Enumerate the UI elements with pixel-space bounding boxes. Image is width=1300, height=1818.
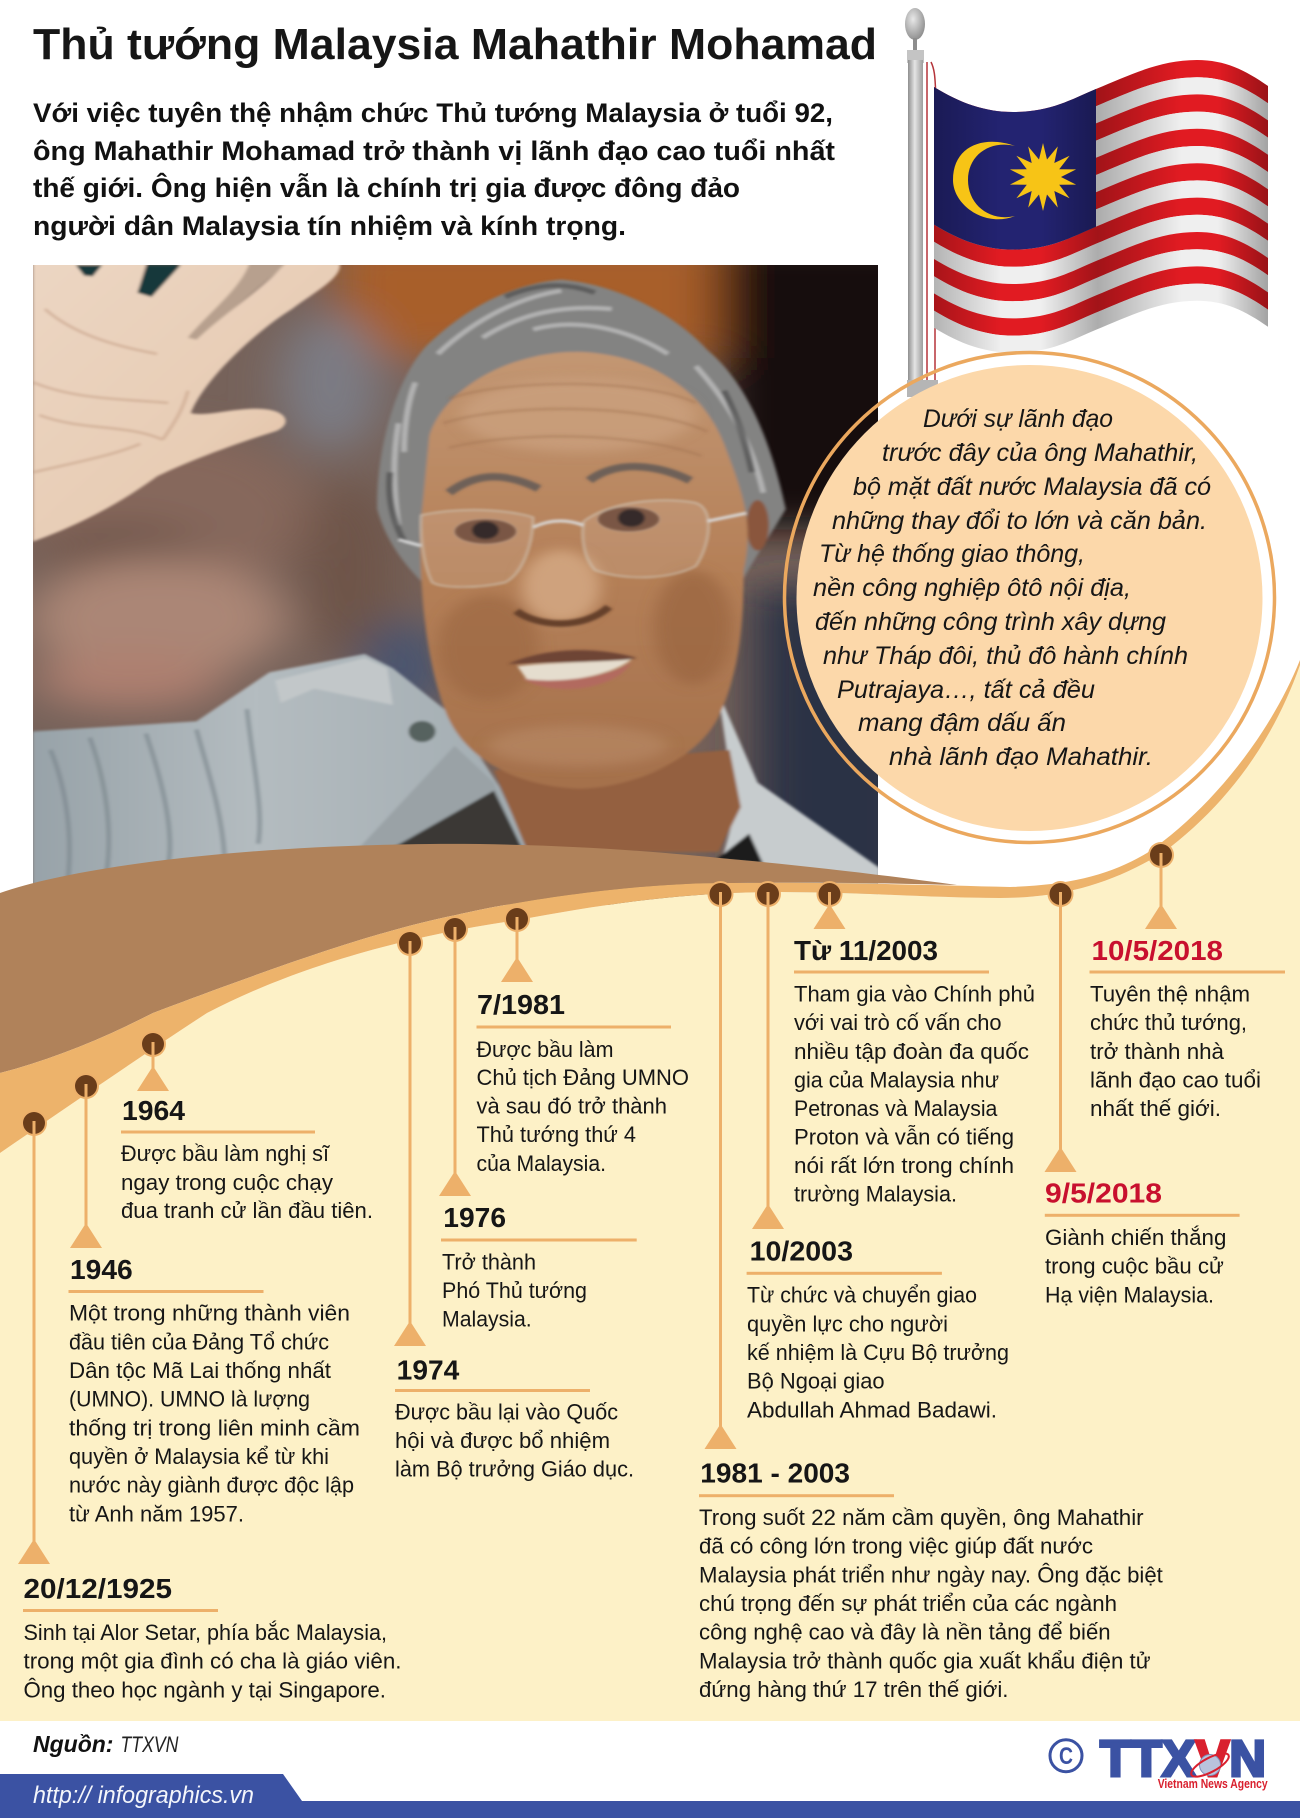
event: 10/2003: 10/2003 xyxy=(750,1236,853,1267)
glasses xyxy=(421,500,709,587)
logo: TTXVN Vietnam News Agency: C xyxy=(1059,1743,1073,1770)
flag pole xyxy=(905,8,938,397)
quote text: Dưới sự lãnh đạo xyxy=(923,405,1113,433)
event: 1946: quyền ở Malaysia kể từ khi xyxy=(69,1444,329,1469)
event: 10/2003: Abdullah Ahmad Badawi. xyxy=(747,1397,997,1422)
arm and shirt xyxy=(33,654,528,913)
event: 9/5/2018: Giành chiến thắng xyxy=(1045,1225,1226,1250)
event: 1976: 1976 xyxy=(443,1202,506,1233)
event: 10/5/2018: chức thủ tướng, xyxy=(1090,1010,1247,1035)
intro text block: thế giới. Ông hiện vẫn là chính trị gia được đông đảo xyxy=(33,172,740,203)
event: 7/1981: của Malaysia. xyxy=(476,1151,606,1176)
event: Từ 11/2003: nói rất lớn trong chính xyxy=(794,1153,1014,1178)
event: 9/5/2018 xyxy=(1045,1178,1240,1307)
event: 7/1981: Thủ tướng thứ 4 xyxy=(476,1122,636,1147)
source line: Nguồn: TTXVN xyxy=(33,1731,179,1757)
event: 1974: hội và được bổ nhiệm xyxy=(395,1428,610,1453)
quote text: trước đây của ông Mahathir, xyxy=(882,439,1198,467)
marker: 1964 xyxy=(137,1031,169,1091)
event: Từ 11/2003: Từ 11/2003 xyxy=(794,935,938,966)
quote text: đến những công trình xây dựng xyxy=(815,608,1166,636)
event: 1974: 1974 xyxy=(397,1354,460,1385)
event: Từ 11/2003: trường Malaysia. xyxy=(794,1182,957,1207)
event: 20/12/1925: Ông theo học ngành y tại Singapore. xyxy=(24,1677,386,1702)
event: 1981 - 2003: Malaysia phát triển như ngày nay. Ông đặc biệt xyxy=(699,1562,1163,1587)
event: 10/2003: quyền lực cho người xyxy=(747,1311,948,1336)
photo: Mahathir Mohamad waving xyxy=(33,265,878,905)
event: 10/5/2018: Tuyên thệ nhậm xyxy=(1090,982,1250,1007)
quote text: Từ hệ thống giao thông, xyxy=(819,540,1085,568)
event: 10/2003: kế nhiệm là Cựu Bộ trưởng xyxy=(747,1340,1009,1365)
event: 1981 - 2003 xyxy=(699,1458,1163,1702)
Malaysian flag xyxy=(934,60,1268,353)
event: 1964: ngay trong cuộc chạy xyxy=(121,1170,333,1195)
event: 1981 - 2003: chú trọng đến sự phát triển của các ngành xyxy=(699,1591,1117,1616)
event: 1981 - 2003: đứng hàng thứ 17 trên thế giới. xyxy=(699,1677,1008,1702)
event: 1946: Một trong những thành viên xyxy=(69,1301,350,1326)
event: 1974 xyxy=(395,1354,634,1482)
event: Từ 11/2003: Petronas và Malaysia xyxy=(794,1096,998,1121)
intro text block xyxy=(33,98,835,241)
event: 10/2003: Từ chức và chuyển giao xyxy=(747,1283,977,1308)
event: 1964: đua tranh cử lần đầu tiên. xyxy=(121,1198,373,1223)
event: 1981 - 2003: Malaysia trở thành quốc gia xuất khẩu điện tử xyxy=(699,1648,1151,1673)
quote text: mang đậm dấu ấn xyxy=(858,709,1066,737)
event: 1946: đầu tiên của Đảng Tổ chức xyxy=(69,1329,329,1354)
event: Từ 11/2003: gia của Malaysia như xyxy=(794,1068,999,1092)
quote text: bộ mặt đất nước Malaysia đã có xyxy=(853,473,1211,501)
event: Từ 11/2003: Tham gia vào Chính phủ xyxy=(794,982,1035,1007)
event: 10/5/2018: lãnh đạo cao tuổi xyxy=(1090,1068,1261,1092)
event: 7/1981: 7/1981 xyxy=(477,989,565,1020)
marker: 20/12/1925 xyxy=(18,1110,50,1564)
marker: 7/1981 xyxy=(501,906,533,982)
event: 1976: Malaysia. xyxy=(442,1307,532,1332)
event: 10/2003 xyxy=(747,1236,1009,1422)
event: 7/1981: Chủ tịch Đảng UMNO xyxy=(476,1065,689,1090)
event: 7/1981: Được bầu làm xyxy=(476,1037,614,1062)
facial features xyxy=(438,378,732,766)
event: 1981 - 2003: Trong suốt 22 năm cầm quyền, ông Mahathir xyxy=(699,1505,1144,1530)
event: 10/5/2018: nhất thế giới. xyxy=(1090,1096,1221,1121)
logo: TTXVN Vietnam News Agency: Vietnam News Agency xyxy=(1158,1776,1268,1791)
event: 1964: 1964 xyxy=(122,1095,185,1126)
event: 7/1981: và sau đó trở thành xyxy=(476,1094,667,1118)
quote text xyxy=(813,405,1211,771)
event: 1976 xyxy=(441,1202,637,1332)
face xyxy=(420,352,748,789)
event: 1976: Trở thành xyxy=(442,1249,536,1274)
quote text: Putrajaya…, tất cả đều xyxy=(837,676,1095,704)
event: 1946 xyxy=(68,1254,360,1526)
event: 10/2003: Bộ Ngoại giao xyxy=(747,1369,885,1394)
event: 9/5/2018: Hạ viện Malaysia. xyxy=(1045,1282,1214,1307)
quote text: như Tháp đôi, thủ đô hành chính xyxy=(823,642,1188,670)
event: 1981 - 2003: 1981 - 2003 xyxy=(700,1458,850,1489)
event: Từ 11/2003: nhiều tập đoàn đa quốc xyxy=(794,1039,1029,1064)
event: 10/5/2018: 10/5/2018 xyxy=(1092,935,1223,966)
quote text: nền công nghiệp ôtô nội địa, xyxy=(813,574,1131,602)
marker: 1981-2003 xyxy=(704,881,736,1449)
event: 1946: nước này giành được độc lập xyxy=(69,1473,354,1498)
event: 1981 - 2003: công nghệ cao và đây là nền tảng để biến xyxy=(699,1620,1111,1645)
marker: 1974 xyxy=(394,930,426,1346)
hand xyxy=(188,262,289,340)
event: 1974: làm Bộ trưởng Giáo dục. xyxy=(395,1457,634,1482)
event: Từ 11/2003: Proton và vẫn có tiếng xyxy=(794,1124,1014,1150)
hair xyxy=(377,280,786,587)
event: 1946: Dân tộc Mã Lai thống nhất xyxy=(69,1358,331,1383)
event: 20/12/1925: trong một gia đình có cha là giáo viên. xyxy=(24,1649,402,1674)
marker: 10/2003 xyxy=(752,881,784,1229)
logo: TTXVN Vietnam News Agency: TTXVN xyxy=(1100,1730,1266,1787)
event: 20/12/1925 xyxy=(23,1573,402,1702)
footer bar xyxy=(0,1774,1300,1818)
intro text block: ông Mahathir Mohamad trở thành vị lãnh đạo cao tuổi nhất xyxy=(33,136,835,166)
event: 1946: (UMNO). UMNO là lượng xyxy=(69,1387,310,1412)
event: 1974: Được bầu lại vào Quốc xyxy=(395,1399,618,1424)
quote circle xyxy=(784,352,1274,842)
event: 1946: 1946 xyxy=(70,1254,133,1285)
timeline background: cream panel xyxy=(0,665,1300,1721)
brown swoosh xyxy=(0,844,957,1073)
event: 10/5/2018: trở thành nhà xyxy=(1090,1039,1225,1064)
marker: 1976 xyxy=(439,916,471,1196)
event: 1981 - 2003: đã có công lớn trong việc giúp đất nước xyxy=(699,1534,1093,1559)
title: Thủ tướng Malaysia Mahathir Mohamad xyxy=(33,20,877,69)
event: 10/5/2018 xyxy=(1090,935,1285,1121)
orange timeline band xyxy=(0,660,1300,1153)
intro text block: Với việc tuyên thệ nhậm chức Thủ tướng Malaysia ở tuổi 92, xyxy=(33,98,833,128)
event: 1946: từ Anh năm 1957. xyxy=(69,1501,244,1526)
event: 9/5/2018: trong cuộc bầu cử xyxy=(1045,1254,1224,1279)
event: 1976: Phó Thủ tướng xyxy=(442,1278,587,1303)
event: 9/5/2018: 9/5/2018 xyxy=(1045,1178,1162,1209)
event: 7/1981 xyxy=(476,989,689,1176)
event: 20/12/1925: Sinh tại Alor Setar, phía bắc Malaysia, xyxy=(24,1620,387,1645)
intro text block: người dân Malaysia tín nhiệm và kính trọng. xyxy=(33,211,626,241)
event: 1964 xyxy=(121,1095,373,1223)
event: Từ 11/2003: với vai trò cố vấn cho xyxy=(794,1010,1002,1035)
marker: 10/5/2018 xyxy=(1145,842,1177,929)
marker: 9/5/2018 xyxy=(1044,881,1076,1172)
event: 20/12/1925: 20/12/1925 xyxy=(24,1573,172,1604)
neck xyxy=(494,750,741,852)
quote text: nhà lãnh đạo Mahathir. xyxy=(889,743,1153,771)
footer url: http:// infographics.vn xyxy=(33,1782,254,1809)
marker: 1946 xyxy=(70,1073,102,1248)
quote text: những thay đổi to lớn và căn bản. xyxy=(832,507,1207,535)
event: 1964: Được bầu làm nghị sĩ xyxy=(121,1141,330,1166)
event: 1946: thống trị trong liên minh cầm xyxy=(69,1415,360,1440)
marker: 11/2003 xyxy=(814,881,846,929)
event: Từ 11/2003 xyxy=(794,935,1035,1207)
